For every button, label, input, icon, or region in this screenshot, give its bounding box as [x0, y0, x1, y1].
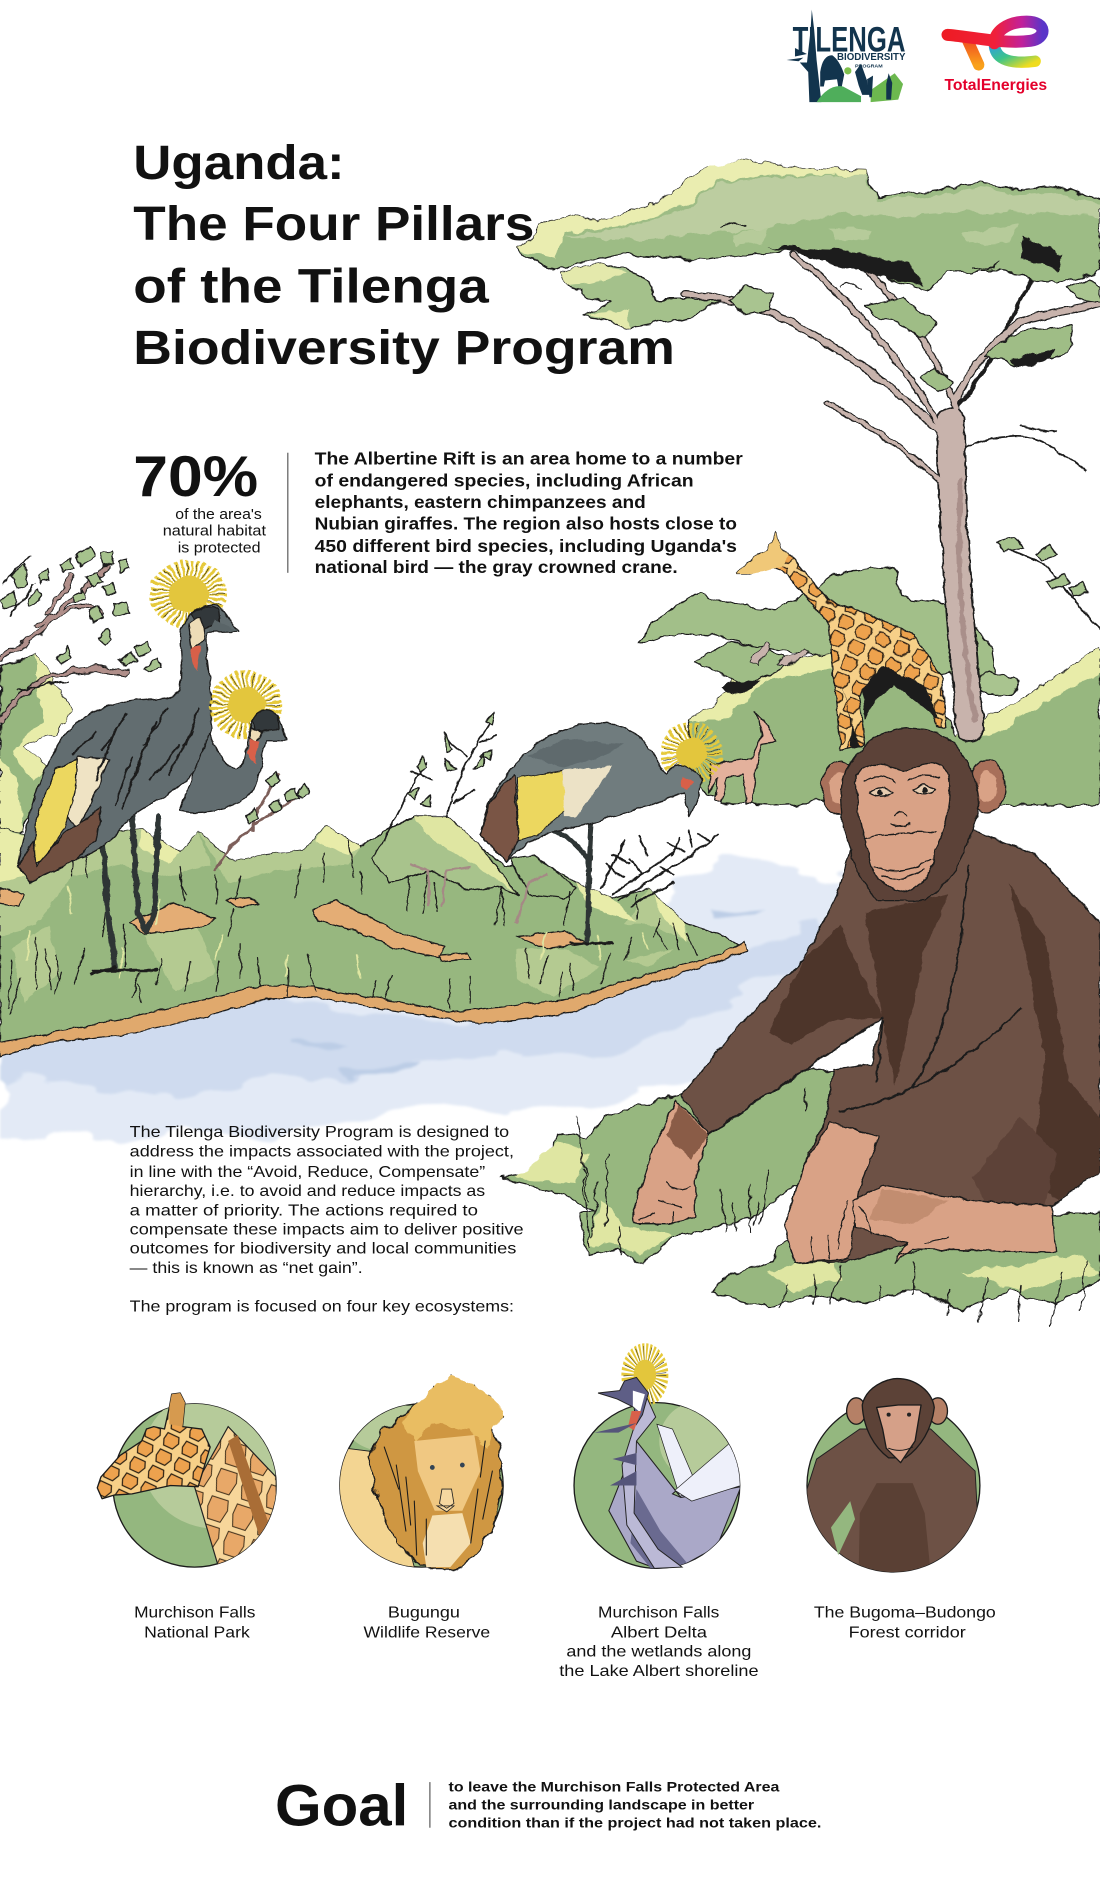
- program description text: in line with the “Avoid, Reduce, Compensate”: [130, 1163, 485, 1181]
- illustration: tree canopy and foliage: [519, 160, 1100, 391]
- caption: Murchison Falls Albert Delta: Murchison Falls: [598, 1604, 719, 1622]
- program description text: The program is focused on four key ecosystems:: [130, 1297, 514, 1315]
- illustration: acacia tree: [684, 245, 1100, 729]
- illustration: twig with leaves at right: [997, 538, 1100, 630]
- caption: Murchison Falls Albert Delta: Albert Delta: [611, 1624, 707, 1642]
- illustration: background bushes and hill: [636, 567, 1100, 806]
- intro text: Albertine Rift: The Albertine Rift is an area home to a number: [315, 449, 743, 469]
- caption: Bugoma-Budongo Forest corridor: [814, 1604, 996, 1642]
- illustration: river: [0, 860, 853, 1141]
- stat: 70% of natural habitat protected: [133, 445, 267, 556]
- medallion: crowned crane: [574, 1358, 746, 1573]
- intro text: Albertine Rift: [315, 449, 743, 577]
- program description text: compensate these impacts aim to deliver positive: [130, 1220, 524, 1238]
- program description text: a matter of priority. The actions required to: [130, 1201, 478, 1219]
- illustration: chimpanzee grass: [501, 1069, 1100, 1327]
- stat: 70% of natural habitat protected: 70%: [133, 445, 258, 509]
- caption: Murchison Falls Albert Delta: the Lake Albert shoreline: [559, 1662, 759, 1680]
- caption: Murchison Falls National Park: Murchison Falls: [134, 1604, 255, 1622]
- tree trunk and branches: [684, 245, 1100, 729]
- logo: Tilenga Biodiversity Program: BIODIVERSITY: [837, 52, 906, 63]
- crest: [168, 576, 209, 613]
- title: [133, 137, 675, 375]
- chimp forearm and hand on knee: [784, 1122, 879, 1263]
- goal heading: Goal: [275, 1773, 408, 1838]
- program description text: [130, 1123, 524, 1315]
- caption: Murchison Falls National Park: National Park: [144, 1624, 251, 1642]
- program description text: address the impacts associated with the project,: [130, 1142, 514, 1160]
- logo: Tilenga Biodiversity Program: TILENGA: [793, 21, 905, 60]
- program description text: outcomes for biodiversity and local communities: [130, 1240, 516, 1258]
- stat: 70% of natural habitat protected: natural habitat: [163, 524, 267, 540]
- intro text: Albertine Rift: national bird — the gray crowned crane.: [315, 557, 678, 577]
- title: Biodiversity Program: [133, 322, 675, 375]
- intro text: Albertine Rift: Nubian giraffes. The region also hosts close to: [315, 514, 737, 534]
- caption: Murchison Falls National Park: [134, 1604, 255, 1642]
- goal text: condition than if the project had not taken place.: [449, 1815, 821, 1831]
- program description text: hierarchy, i.e. to avoid and reduce impacts as: [130, 1182, 485, 1200]
- caption: Bugungu Wildlife Reserve: Bugungu: [388, 1604, 460, 1622]
- caption: Murchison Falls Albert Delta: [559, 1604, 759, 1680]
- illustration: antelope: [709, 712, 776, 805]
- logo: TotalEnergies: TotalEnergies: [944, 77, 1047, 94]
- intro text: Albertine Rift: elephants, eastern chimpanzees and: [315, 492, 646, 512]
- chimp body: [681, 793, 1100, 1263]
- chimp ears: [821, 761, 857, 814]
- chimp head: [841, 728, 979, 901]
- illustration: plants and shrubs: [216, 713, 718, 907]
- caption: Bugungu Wildlife Reserve: Wildlife Reserve: [364, 1624, 490, 1642]
- illustration: left hill and branches: [0, 548, 162, 841]
- caption: Bugungu Wildlife Reserve: [364, 1604, 490, 1642]
- illustration: giraffe: [736, 532, 946, 751]
- intro text: Albertine Rift: of endangered species, including African: [315, 470, 694, 490]
- logo: Tilenga Biodiversity Program: PROGRAM: [855, 64, 883, 69]
- caption: Murchison Falls Albert Delta: and the wetlands along: [566, 1643, 751, 1661]
- stat: 70% of natural habitat protected: is protected: [178, 540, 261, 556]
- goal text: to leave the Murchison Falls Protected Area: [449, 1779, 779, 1795]
- goal text: and the surrounding landscape in better: [449, 1798, 755, 1814]
- caption: Bugoma-Budongo Forest corridor: Forest corridor: [849, 1624, 966, 1642]
- medallion: giraffe: [97, 1389, 291, 1567]
- program description text: The Tilenga Biodiversity Program is designed to: [130, 1123, 509, 1141]
- medallion: chimpanzee: [807, 1379, 980, 1573]
- chimp foot: [853, 1185, 1056, 1263]
- tree foliage clusters: [560, 263, 722, 328]
- title: of the Tilenga: [133, 261, 490, 314]
- chimp hand on ground: [633, 1101, 709, 1224]
- logo: TotalEnergies: [944, 22, 1047, 94]
- goal text: [449, 1779, 821, 1831]
- illustration: crane 3: [480, 723, 709, 943]
- illustration: crane 1: [18, 576, 238, 974]
- caption: Bugoma-Budongo Forest corridor: The Bugoma–Budongo: [814, 1604, 996, 1622]
- intro text: Albertine Rift: 450 different bird species, including Uganda's: [315, 536, 737, 556]
- program description text: — this is known as “net gain”.: [130, 1259, 363, 1277]
- illustration: island: [0, 817, 747, 1057]
- illustration: chimpanzee: [633, 728, 1100, 1263]
- divider: [286, 453, 289, 573]
- logo: Tilenga Biodiversity Program: [787, 10, 906, 102]
- title: The Four Pillars: [133, 198, 534, 251]
- illustration: crane 2: [180, 687, 286, 812]
- stat: 70% of natural habitat protected: of the area's: [175, 507, 262, 523]
- medallion: lion: [336, 1377, 503, 1567]
- title: Uganda:: [133, 137, 345, 190]
- grass tufts: [8, 841, 697, 1015]
- island bushes: [372, 817, 519, 895]
- chimp face: [856, 763, 950, 892]
- goal divider: [428, 1782, 431, 1828]
